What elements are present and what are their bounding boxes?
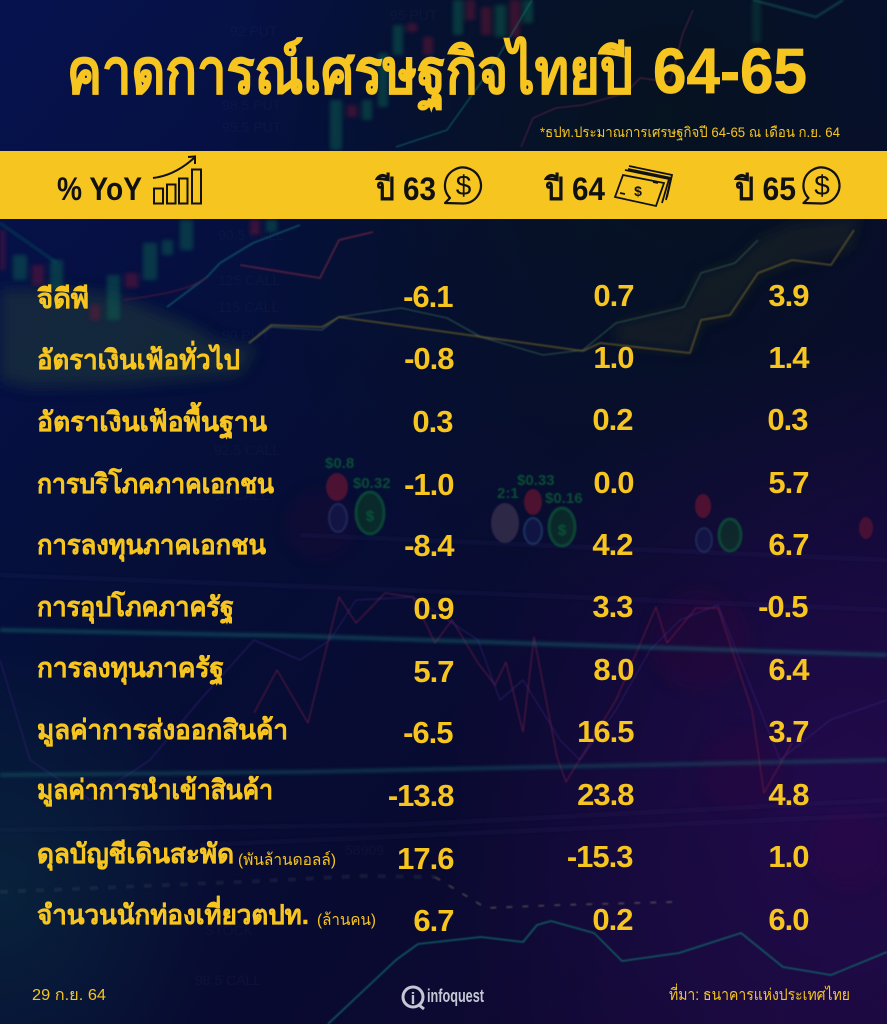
background coin icons: $0.33 xyxy=(517,472,555,489)
row: import value: -13.8 xyxy=(388,778,454,813)
row: GDP xyxy=(37,278,809,314)
row: import value: 4.8 xyxy=(768,777,809,812)
row: current account xyxy=(37,839,808,876)
background coin icons: $0.32 xyxy=(353,475,391,492)
row: GDP: 0.7 xyxy=(593,278,634,313)
footer date: 29 ก.ย. 64 xyxy=(32,987,106,1004)
background coin icons xyxy=(325,455,873,552)
row: private investment xyxy=(37,527,808,563)
background ticker labels: 95.5 PUT xyxy=(222,119,282,135)
row: GDP: 3.9 xyxy=(768,278,809,313)
background coin icons: 2:1 xyxy=(497,485,519,502)
background coin icons: $ xyxy=(366,508,375,525)
background ticker labels: 125 CALL xyxy=(218,272,280,288)
row: government investment xyxy=(37,652,810,689)
row: government investment: 8.0 xyxy=(593,652,634,687)
footnote: *ธปท.ประมาณการเศรษฐกิจปี 64-65 ณ เดือน ก.ย. 64 xyxy=(540,124,840,141)
icon: banknotes xyxy=(615,166,672,206)
background ticker labels: STOCK xyxy=(205,922,254,938)
row: current account: (พันล้านดอลล์) xyxy=(238,850,336,869)
icon: dollar bubble: $ xyxy=(456,170,472,201)
row: private investment: 4.2 xyxy=(592,527,632,562)
row: import value: มูลค่าการนำเข้าสินค้า xyxy=(37,775,273,807)
row: government investment: 6.4 xyxy=(768,652,810,687)
row: government consumption: 0.9 xyxy=(413,591,454,626)
header: ปี 65: ปี 65 xyxy=(733,171,796,207)
background ticker labels: 95 PUT xyxy=(390,7,438,23)
icon: dollar bubble xyxy=(445,168,481,204)
background ticker labels: 90.5 CALL xyxy=(218,227,284,243)
row: export value: -6.5 xyxy=(403,715,453,750)
row: government consumption xyxy=(37,589,808,626)
row: export value xyxy=(37,714,808,750)
icon: dollar bubble xyxy=(803,168,839,204)
row: foreign tourists: 0.2 xyxy=(592,902,632,937)
row: private investment: การลงทุนภาคเอกชน xyxy=(37,530,267,562)
background ticker labels: 98.5 CALL xyxy=(195,972,261,988)
title: 64-65 xyxy=(653,35,807,107)
row: headline inflation xyxy=(37,340,810,376)
row: private investment: 6.7 xyxy=(768,527,808,562)
row: export value: 16.5 xyxy=(577,714,634,749)
row: import value xyxy=(37,775,809,813)
icon: banknotes: $ xyxy=(634,183,642,199)
row: private consumption xyxy=(37,465,808,502)
row: core inflation: 0.3 xyxy=(767,402,808,437)
title: คาดการณ์เศรษฐกิจไทยปี xyxy=(67,36,633,112)
header band xyxy=(0,151,887,219)
row: foreign tourists: จำนวนนักท่องเที่ยวตปท. xyxy=(37,895,309,930)
footer source: ที่มา: ธนาคารแห่งประเทศไทย xyxy=(669,983,850,1004)
row: foreign tourists: 6.0 xyxy=(768,902,808,937)
row: government consumption: -0.5 xyxy=(758,589,808,624)
background ticker labels: 58909 xyxy=(345,842,384,858)
background coin icons: $ xyxy=(558,522,567,539)
row: government investment: การลงทุนภาครัฐ xyxy=(37,653,224,686)
row: government consumption: การอุปโภคภาครัฐ xyxy=(37,590,234,625)
header: ปี 64: ปี 64 xyxy=(543,171,605,207)
row: current account: -15.3 xyxy=(567,839,633,874)
row: headline inflation: 1.4 xyxy=(768,340,810,375)
row: foreign tourists: 6.7 xyxy=(413,903,454,938)
row: government consumption: 3.3 xyxy=(592,589,633,624)
row: current account: 17.6 xyxy=(397,841,454,876)
header: % YoY: % YoY xyxy=(57,171,142,207)
row: export value: 3.7 xyxy=(768,714,808,749)
row: private investment: -8.4 xyxy=(404,528,455,563)
row: core inflation: อัตราเงินเฟ้อพื้นฐาน xyxy=(37,401,268,440)
row: private consumption: การบริโภคภาคเอกชน xyxy=(37,467,274,499)
background coin icons: $0.16 xyxy=(545,490,583,507)
row: current account: 1.0 xyxy=(768,839,808,874)
row: import value: 23.8 xyxy=(577,777,634,812)
row: foreign tourists xyxy=(37,895,808,938)
icon: dollar bubble: $ xyxy=(814,170,830,201)
icon: growth chart xyxy=(153,156,201,204)
row: core inflation xyxy=(37,401,808,440)
background ticker labels: 98.5 PUT xyxy=(222,97,282,113)
row: headline inflation: อัตราเงินเฟ้อทั่วไป xyxy=(37,340,240,375)
row: private consumption: 5.7 xyxy=(768,465,808,500)
row: core inflation: 0.3 xyxy=(412,404,453,439)
header: ปี 63: ปี 63 xyxy=(374,171,436,207)
row: private consumption: -1.0 xyxy=(404,467,454,502)
row: headline inflation: 1.0 xyxy=(593,340,634,375)
background ticker labels: 92.5 CALL xyxy=(214,442,280,458)
row: private consumption: 0.0 xyxy=(593,465,634,500)
row: GDP: จีดีพี xyxy=(37,284,89,314)
row: headline inflation: -0.8 xyxy=(404,341,454,376)
candlesticks xyxy=(13,0,761,320)
row: core inflation: 0.2 xyxy=(592,402,632,437)
infoquest logo xyxy=(403,986,484,1009)
background ticker labels: 115 CALL xyxy=(218,299,279,315)
background ticker labels: 92 PUT xyxy=(230,23,278,39)
background coin icons: $0.8 xyxy=(325,455,354,472)
row: GDP: -6.1 xyxy=(403,279,453,314)
infoquest logo: i xyxy=(411,989,415,1008)
background ticker labels: 95 CALL xyxy=(214,487,269,503)
row: export value: มูลค่าการส่งออกสินค้า xyxy=(37,715,288,747)
row: current account: ดุลบัญชีเดินสะพัด xyxy=(37,839,234,871)
row: foreign tourists: (ล้านคน) xyxy=(317,911,376,929)
background ticker labels: 90 PUT xyxy=(222,327,270,343)
infoquest logo: infoquest xyxy=(427,986,484,1006)
background ticker labels xyxy=(195,7,438,988)
row: government investment: 5.7 xyxy=(413,654,454,689)
